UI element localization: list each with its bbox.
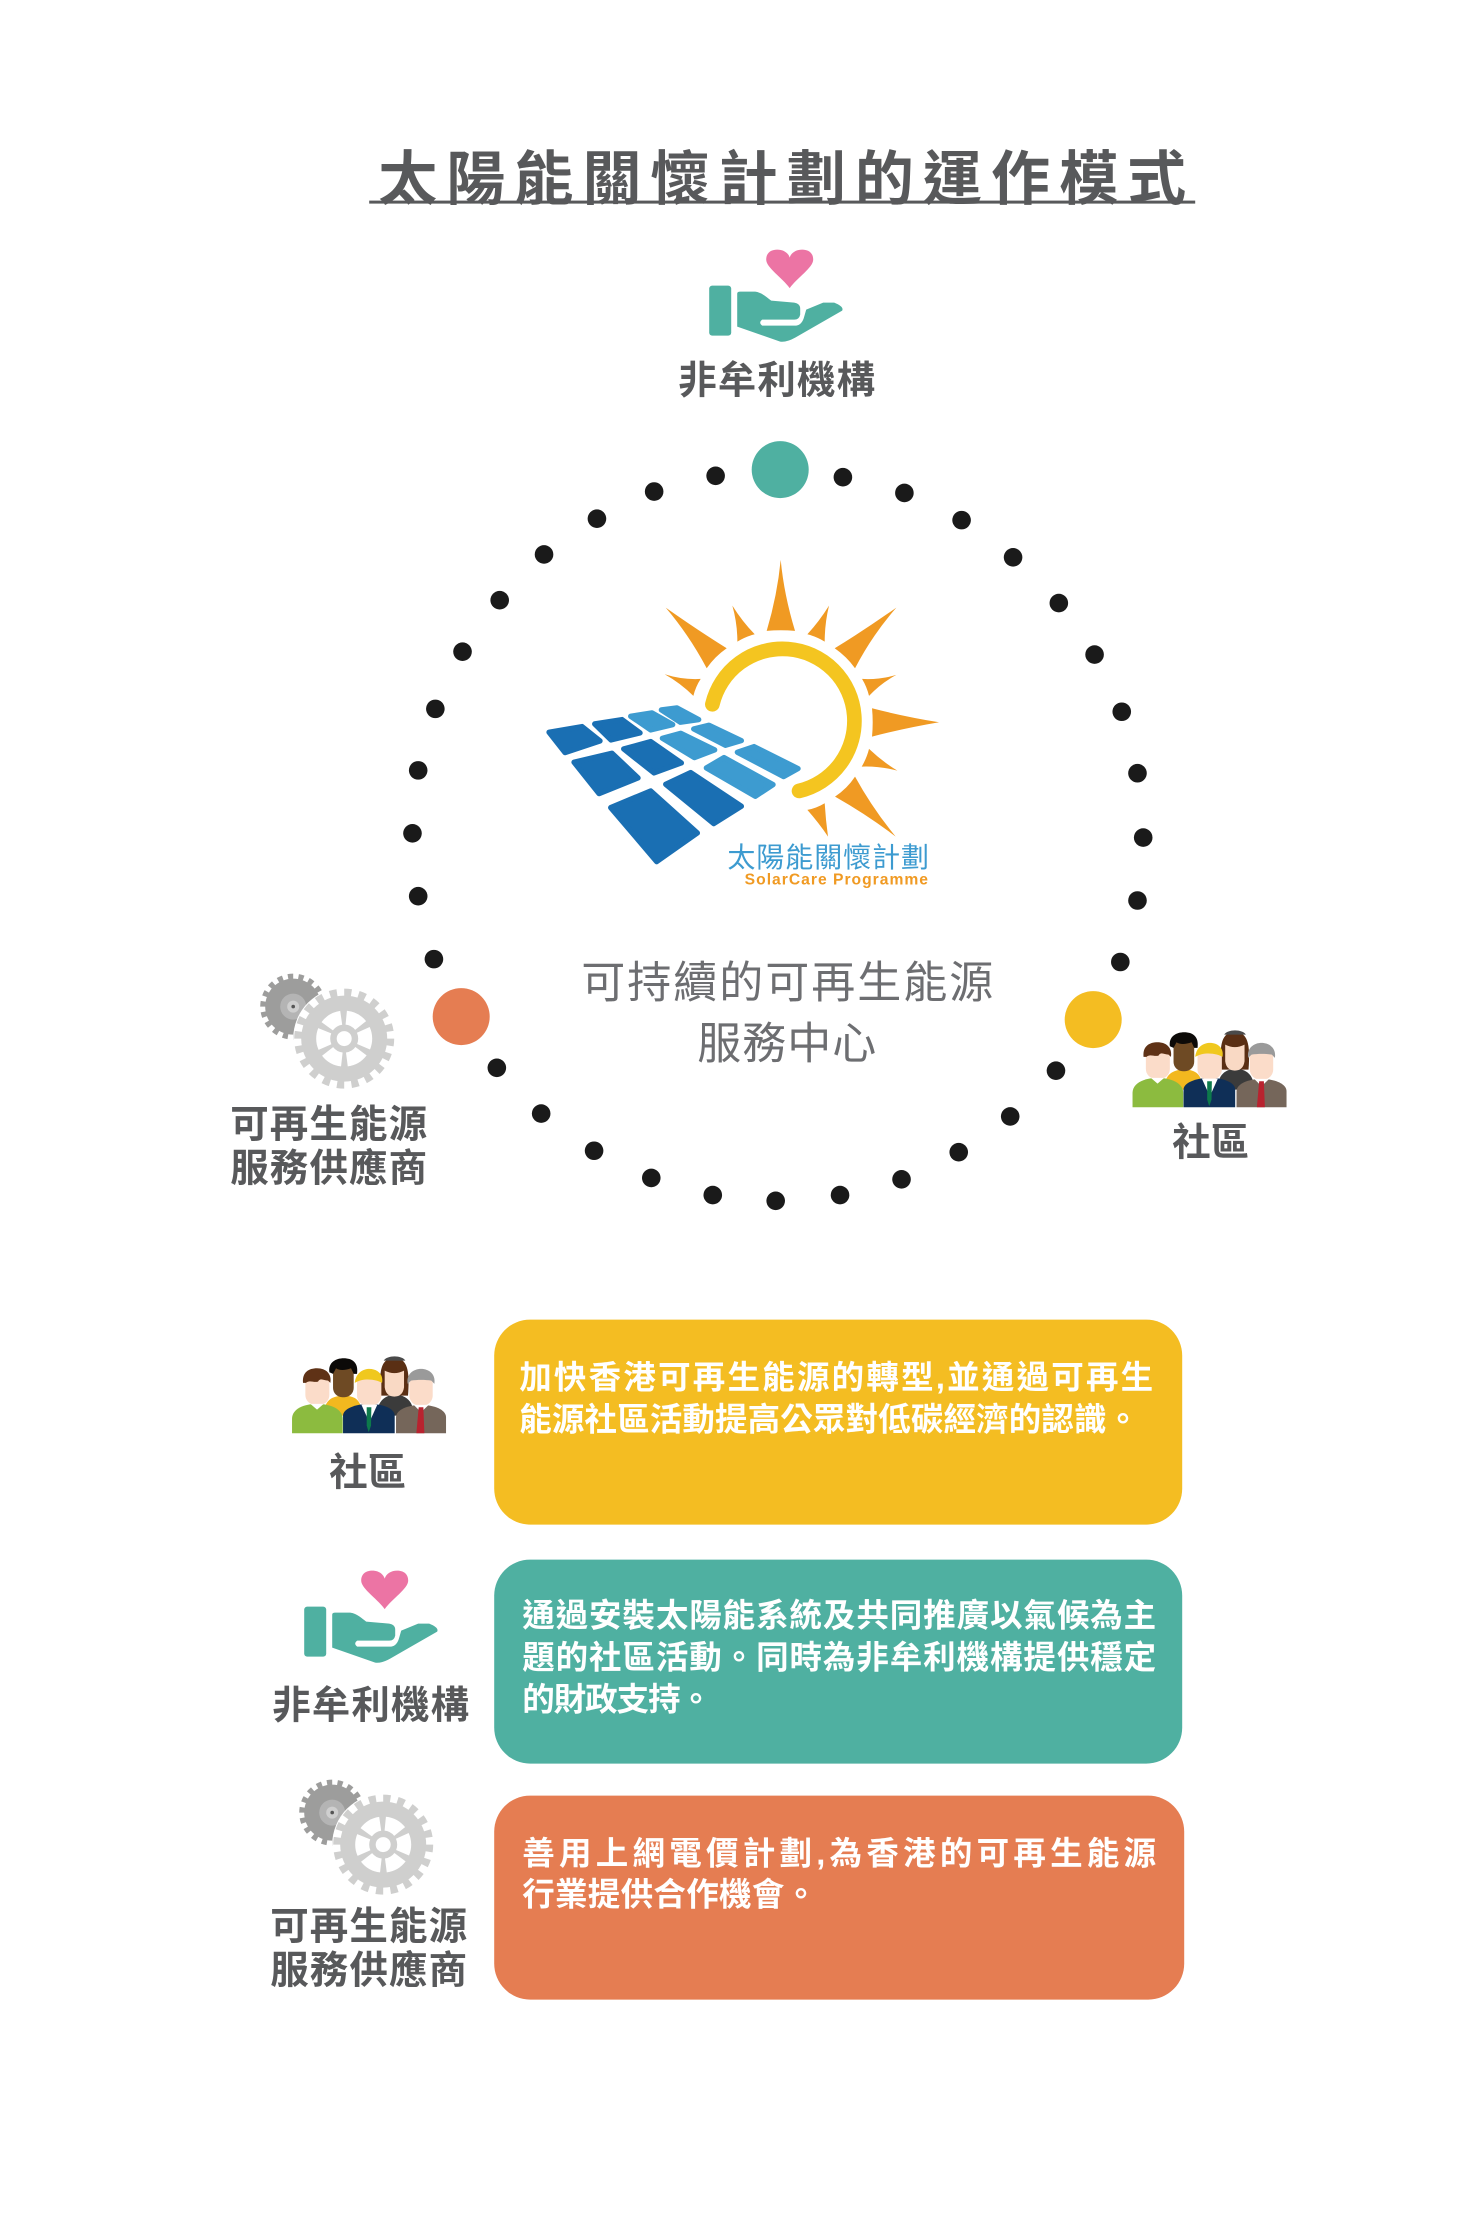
label: 可再生能源服務供應商 left bbox=[230, 1104, 427, 1191]
center text: 可持續的可再生能源 bbox=[581, 959, 993, 1008]
node: orange circle bbox=[433, 988, 490, 1045]
solar panels bbox=[549, 708, 798, 862]
icon: top hand with heart bbox=[709, 250, 843, 342]
logo name zh: 太陽能關懷計劃 bbox=[727, 842, 929, 873]
center text bbox=[581, 959, 993, 1069]
logo: SolarCare Programme bbox=[549, 560, 939, 889]
node: teal circle bbox=[752, 441, 809, 498]
panel: non-profit: 的財政支持。 bbox=[522, 1682, 712, 1718]
icon: hand with heart lower bbox=[304, 1571, 438, 1663]
panel: renewable energy service providers: 善用上網電價計劃,為香港的可再生能源 bbox=[522, 1836, 1156, 1872]
panel: non-profit: 題的社區活動。同時為非牟利機構提供穩定 bbox=[522, 1640, 1156, 1676]
label: 非牟利機構 lower: 非牟利機構 bbox=[272, 1685, 469, 1728]
panel: non-profit: 通過安裝太陽能系統及共同推廣以氣候為主 bbox=[522, 1598, 1156, 1634]
icon: community people lower bbox=[292, 1356, 446, 1433]
panel: renewable energy service providers bbox=[494, 1796, 1184, 2000]
label: 可再生能源服務供應商 left: 服務供應商 bbox=[230, 1148, 427, 1191]
center text: 服務中心 bbox=[697, 1020, 876, 1069]
dotted circle bbox=[403, 466, 1152, 1210]
panel: renewable energy service providers: 行業提供合作機會。 bbox=[522, 1877, 817, 1913]
title: 太陽能關懷計劃的運作模式: 太陽能關懷計劃的運作模式 bbox=[378, 147, 1186, 213]
panel: community: 加快香港可再生能源的轉型,並通過可再生 bbox=[519, 1360, 1153, 1396]
label: 社區 right: 社區 bbox=[1172, 1122, 1249, 1165]
label: 可再生能源服務供應商 lower: 服務供應商 bbox=[270, 1950, 467, 1993]
sun rays bbox=[665, 560, 939, 837]
panel: community: 能源社區活動提高公眾對低碳經濟的認識。 bbox=[519, 1402, 1139, 1438]
label: 社區 lower: 社區 bbox=[329, 1452, 406, 1495]
label: 可再生能源服務供應商 lower bbox=[270, 1906, 467, 1993]
icon: community people right bbox=[1133, 1030, 1287, 1107]
label: 可再生能源服務供應商 lower: 可再生能源 bbox=[270, 1906, 467, 1949]
label: 非牟利機構 top: 非牟利機構 bbox=[678, 360, 875, 403]
sun arc bbox=[712, 649, 854, 791]
panel: non-profit bbox=[494, 1560, 1182, 1764]
label: 可再生能源服務供應商 left: 可再生能源 bbox=[230, 1104, 427, 1147]
logo name en: SolarCare Programme bbox=[745, 872, 928, 889]
icon: gears lower bbox=[302, 1783, 434, 1896]
icon: gears left bbox=[263, 977, 395, 1090]
panel: community bbox=[494, 1320, 1182, 1525]
node: yellow circle bbox=[1065, 991, 1122, 1048]
